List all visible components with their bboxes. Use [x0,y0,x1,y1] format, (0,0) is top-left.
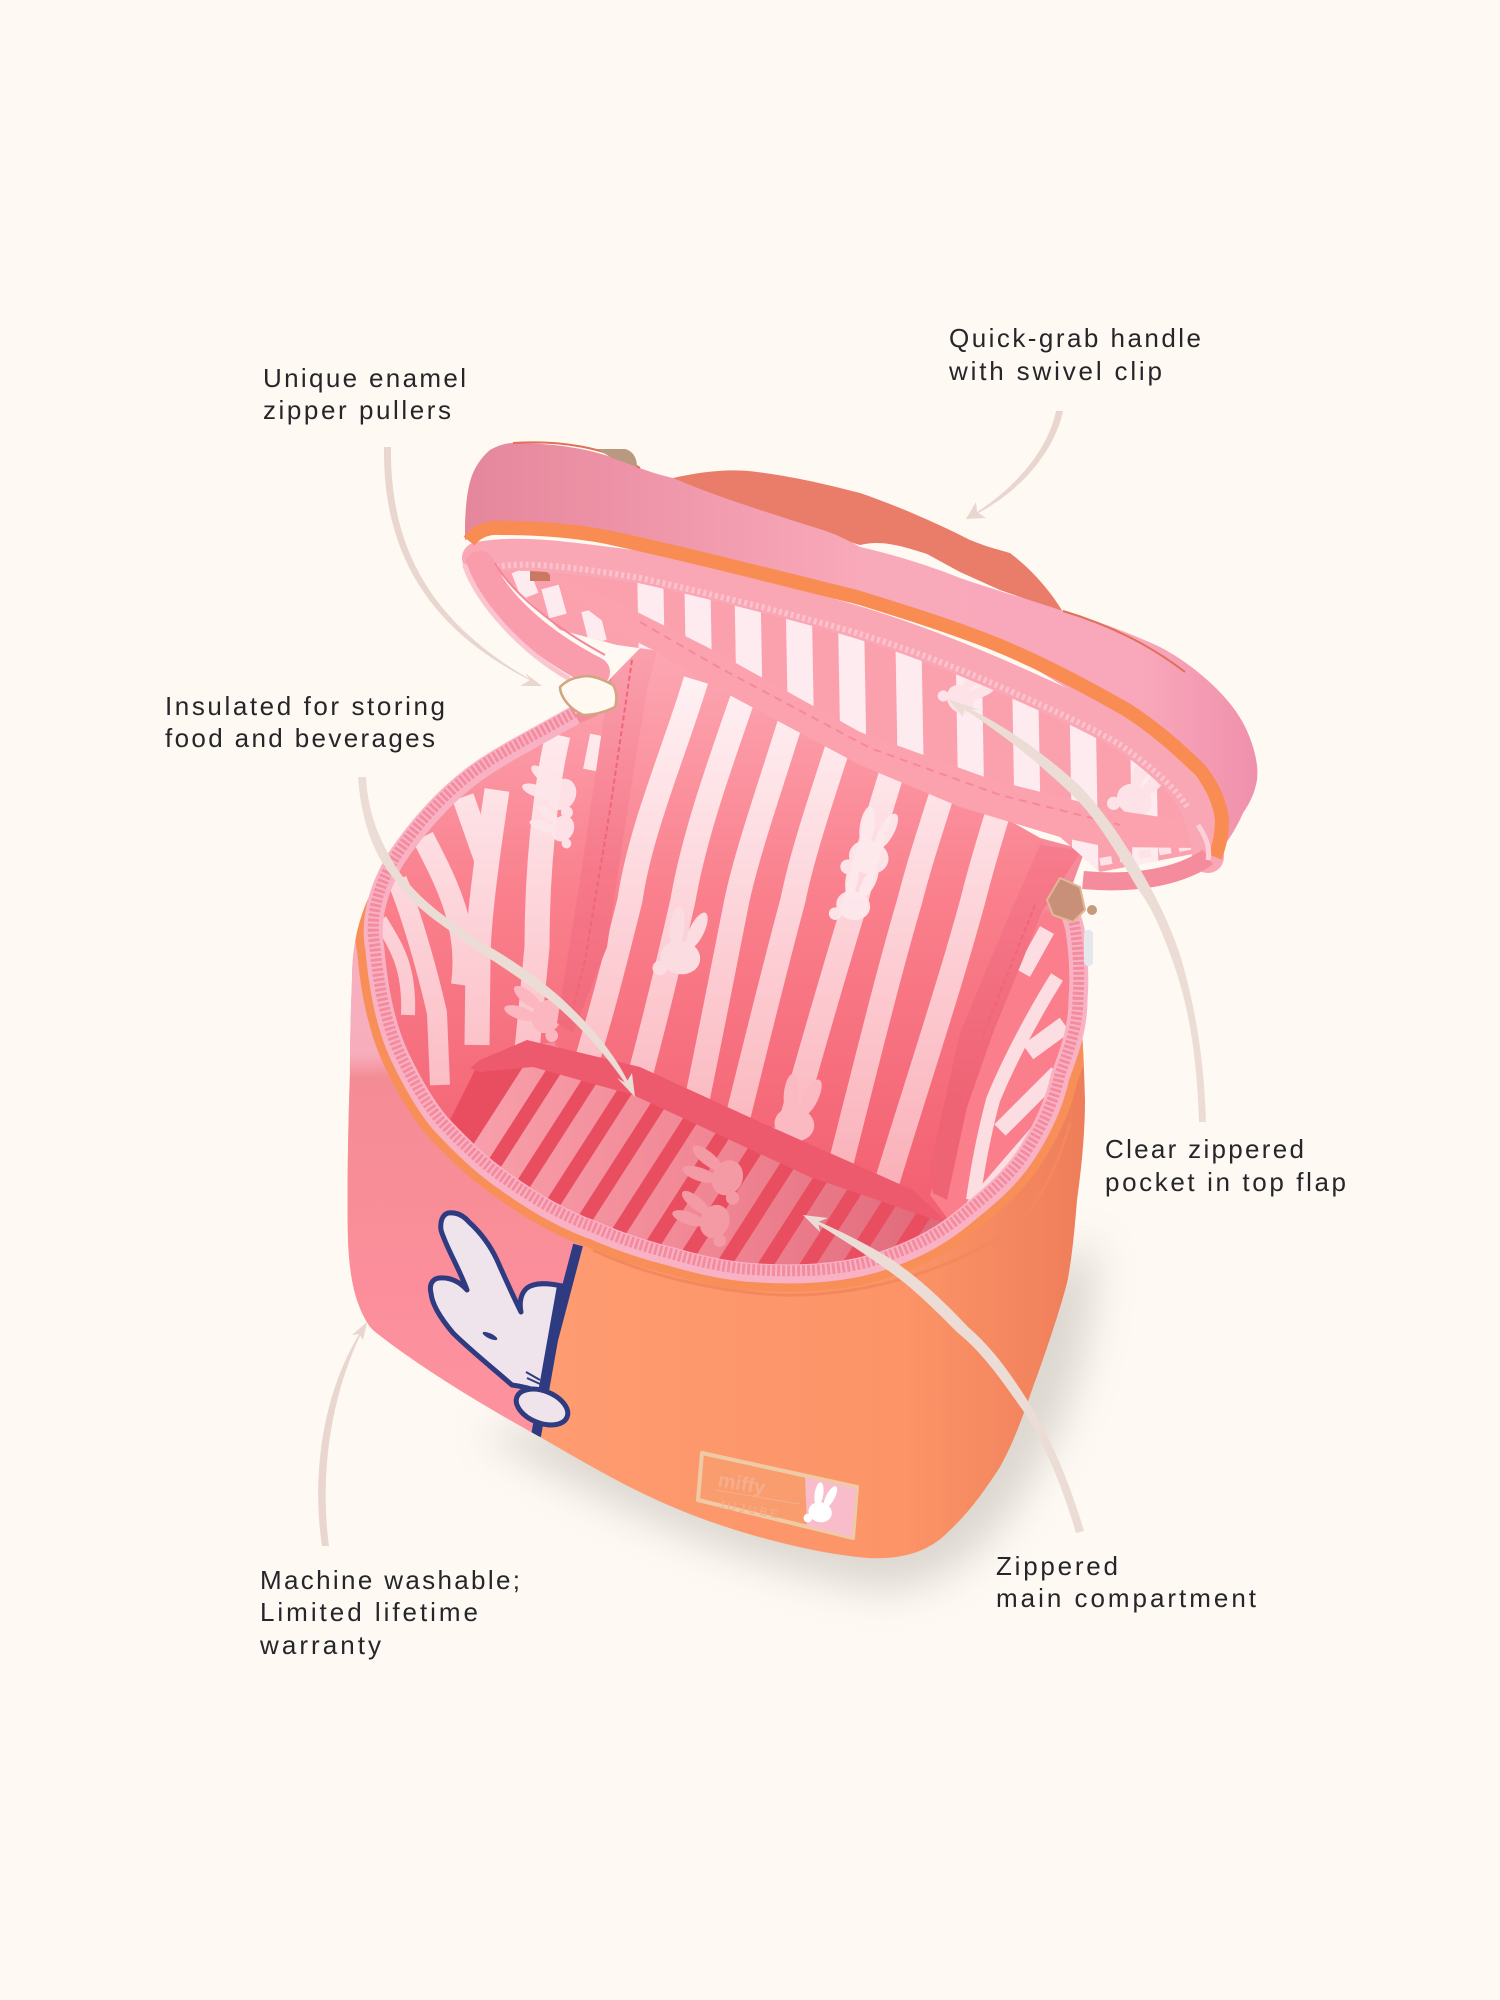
enamel zipper puller right [1047,878,1097,966]
hinge binding strip [545,570,1200,848]
lid interior pocket stripes [499,570,1192,872]
label: zipper pullers [263,363,466,425]
arrow: clear pocket [948,699,1206,1122]
left wall bunnies [522,765,576,848]
label: clear pocket [1105,1134,1346,1197]
brand badge: miffy [716,1469,768,1499]
label: clear pocket: Clear zippered [1105,1134,1304,1164]
floor stripes [450,1067,945,1264]
label: clear pocket: pocket in top flap [1105,1167,1346,1197]
label: handle: with swivel clip [948,356,1162,386]
orange body [348,720,1085,1558]
right seam [930,845,1082,1200]
floor back fold [470,1040,950,1225]
lid top edge [513,442,1185,672]
label: zipper pullers: zipper pullers [263,395,451,425]
label: handle: Quick-grab handle [949,323,1201,353]
left lid zipper [480,566,595,672]
left wall stripes [382,716,602,1120]
label: insulated [165,691,445,753]
bag body exterior [348,897,1085,1558]
lid zipper band [478,555,1208,857]
opening rim zipper [373,712,1079,1274]
label: machine washable [259,1565,520,1660]
label: handle [948,323,1201,386]
back wall stripes [555,650,1043,1220]
handle strap [673,470,1063,612]
arrow: main compartment [803,1215,1084,1533]
arrow: machine washable [318,1322,367,1546]
label: zipper pullers: Unique enamel [263,363,466,393]
body lip line [593,1122,1070,1295]
arrow: insulated [358,777,635,1097]
zipper tip highlight [1198,825,1209,860]
right wall stripes [930,910,1070,1218]
left lid zipper outer edge [465,566,568,678]
small tab inside lid [530,563,550,581]
left lid zipper inner edge [495,563,605,655]
label: machine washable: warranty [259,1630,381,1660]
lid outer shell [465,443,1257,857]
label: main compartment: main compartment [996,1583,1257,1613]
orange rim piping [373,860,1078,1274]
lid orange piping [469,528,1222,857]
strip stitching [640,622,1120,825]
handle clip [597,449,637,467]
label: main compartment [996,1551,1257,1613]
back wall bunnies [828,807,898,920]
pink body panel [348,902,584,1437]
interior lining [382,648,1082,1264]
left seam [557,648,646,1024]
top lid [465,442,1257,900]
lid zipper teeth [490,565,1188,808]
right lid zipper [1083,857,1208,881]
label: insulated: Insulated for storing [165,691,445,721]
lid pocket bunnies [938,685,994,712]
label: machine washable: Machine washable; [260,1565,520,1595]
label: insulated: food and beverages [165,723,435,753]
enamel zipper puller left [560,676,616,715]
label: machine washable: Limited lifetime [260,1597,478,1627]
product: open lunch bag [330,442,1257,1590]
label: main compartment: Zippered [996,1551,1118,1581]
arrow: handle [966,411,1063,519]
arrow: zipper pullers [384,447,542,686]
miffy character [430,1213,578,1436]
brand badge: JUJUBE [717,1497,782,1522]
bag drop shadow [480,1240,1095,1590]
brand badge [698,1453,857,1538]
